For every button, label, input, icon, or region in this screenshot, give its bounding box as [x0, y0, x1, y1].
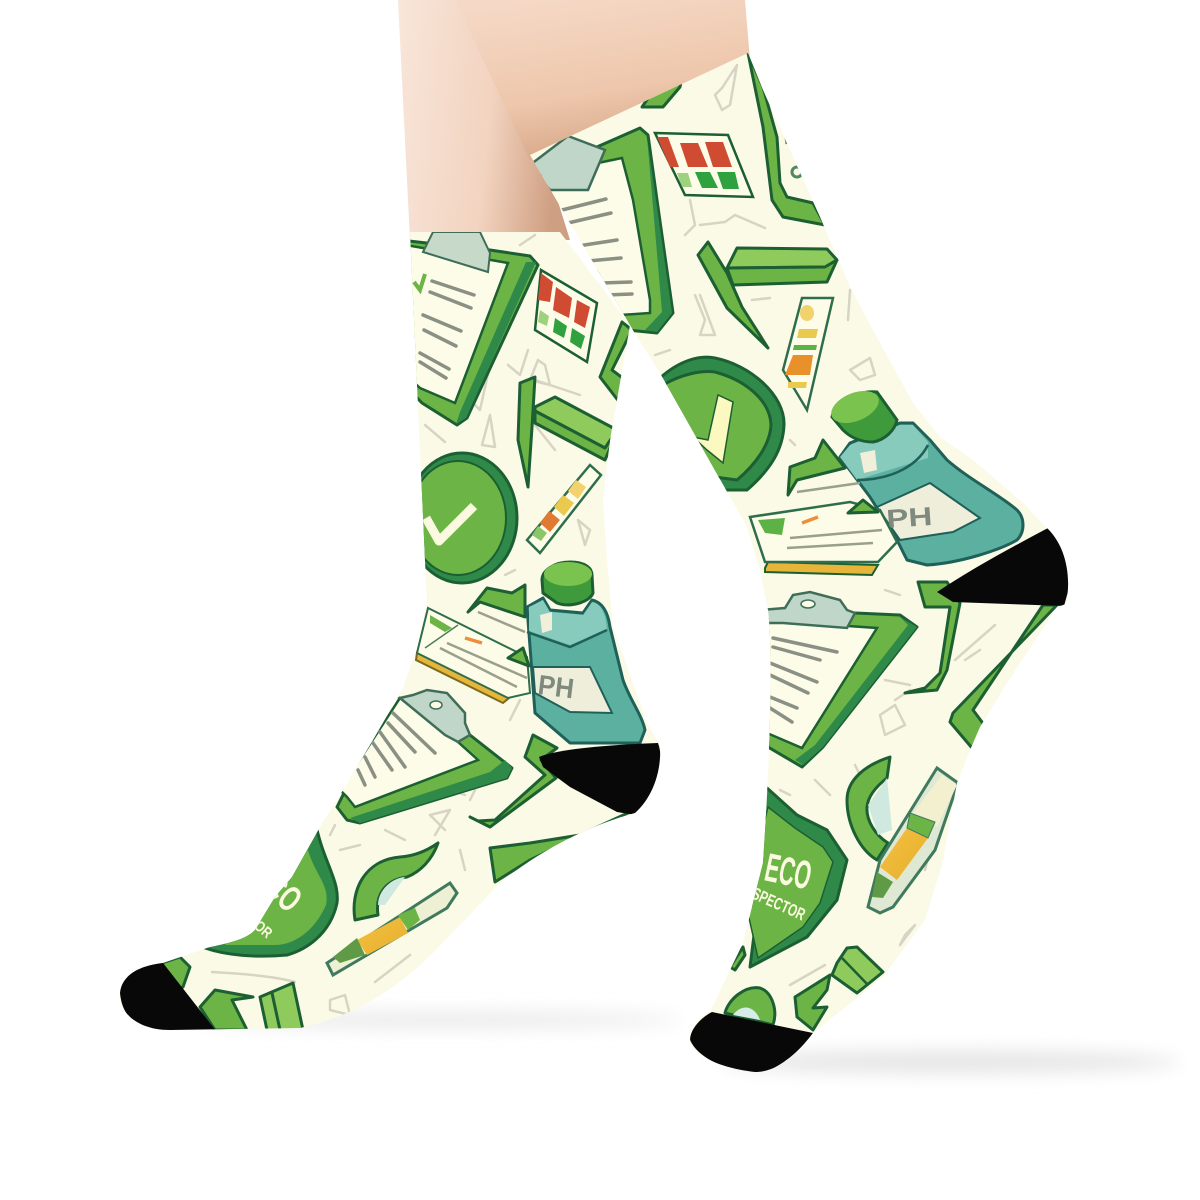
- green bar with spike: [698, 242, 837, 348]
- clipboard clip: [400, 690, 470, 742]
- ECO shield: [205, 820, 337, 956]
- clipboard paper: [400, 244, 508, 403]
- right sock base: [520, 40, 1090, 1080]
- test strip: [527, 465, 601, 553]
- shield text: ECO: [245, 858, 309, 920]
- clipboard text lines: [770, 638, 837, 722]
- shield text: ECO: [761, 846, 815, 898]
- left leg skin: [398, 0, 570, 240]
- clipboard 2: [337, 690, 512, 823]
- green bar: [535, 397, 617, 460]
- label fragments: [784, 138, 802, 178]
- bottle cap: [542, 562, 593, 605]
- bracket right: [905, 582, 960, 693]
- green bracket top right: [748, 53, 825, 225]
- check badge: [407, 453, 517, 583]
- PH label text: PH: [885, 501, 933, 534]
- tick on paper: [414, 274, 425, 290]
- toe green bits: [725, 947, 883, 1030]
- clipboard text lines: [420, 281, 474, 378]
- right sock doodles: [655, 65, 995, 985]
- check badge: [650, 357, 784, 490]
- C ring: [354, 843, 438, 920]
- floor shadow: left foot: [200, 1012, 680, 1028]
- test tube: [868, 768, 958, 913]
- left sock: [120, 232, 660, 1030]
- right leg skin: [455, 0, 750, 160]
- clipboard clip: [530, 136, 605, 190]
- product illustration: pair of socks on legs: [120, 0, 1166, 1078]
- clipboard clip: [423, 232, 490, 272]
- clipboard 1: [400, 232, 538, 425]
- check mark: [426, 506, 474, 541]
- lens ring: [847, 757, 892, 860]
- left sock doodles: [212, 235, 590, 1015]
- floor shadow: right foot: [720, 1051, 1180, 1073]
- red and green test card: [655, 133, 753, 197]
- clipboard text lines: [562, 199, 632, 295]
- clipboard clip: [760, 592, 855, 628]
- document with green flaps: [750, 440, 897, 575]
- small green stripe: [730, 947, 745, 970]
- green spike: [518, 377, 535, 487]
- shield subtext: INSPECTOR: [211, 884, 276, 942]
- ECO Inspector shield: [738, 788, 847, 967]
- bracket lower right: [950, 605, 1057, 748]
- clipboard paper: [540, 158, 650, 315]
- right toe black: [690, 1012, 813, 1074]
- left toe black: [120, 963, 217, 1032]
- left heel black: [539, 743, 661, 815]
- green bracket fragment: [598, 320, 630, 402]
- PH label text: PH: [536, 669, 576, 704]
- bottle with PH label: [827, 385, 1023, 565]
- clipboard board: [400, 240, 538, 425]
- bottle cap: [832, 392, 897, 442]
- test tube: [327, 883, 457, 975]
- right heel black: [937, 528, 1072, 606]
- clipboard text lines: [358, 713, 435, 785]
- clipboard 1: [530, 128, 673, 333]
- shield subtext: INSPECTOR: [738, 879, 808, 924]
- clipboard 3: [760, 592, 917, 767]
- toe green bits: [162, 957, 303, 1030]
- bottle with PH label: [527, 562, 645, 743]
- green fragment at top: [640, 84, 682, 108]
- check mark: [693, 395, 733, 463]
- lower bracket: [490, 812, 630, 882]
- document with green flaps: [416, 585, 530, 703]
- bracket under heel: [470, 735, 557, 827]
- right sock: [520, 40, 1090, 1080]
- test strip: [783, 298, 833, 410]
- red and green test card: [535, 270, 597, 362]
- left sock base: [120, 232, 660, 1029]
